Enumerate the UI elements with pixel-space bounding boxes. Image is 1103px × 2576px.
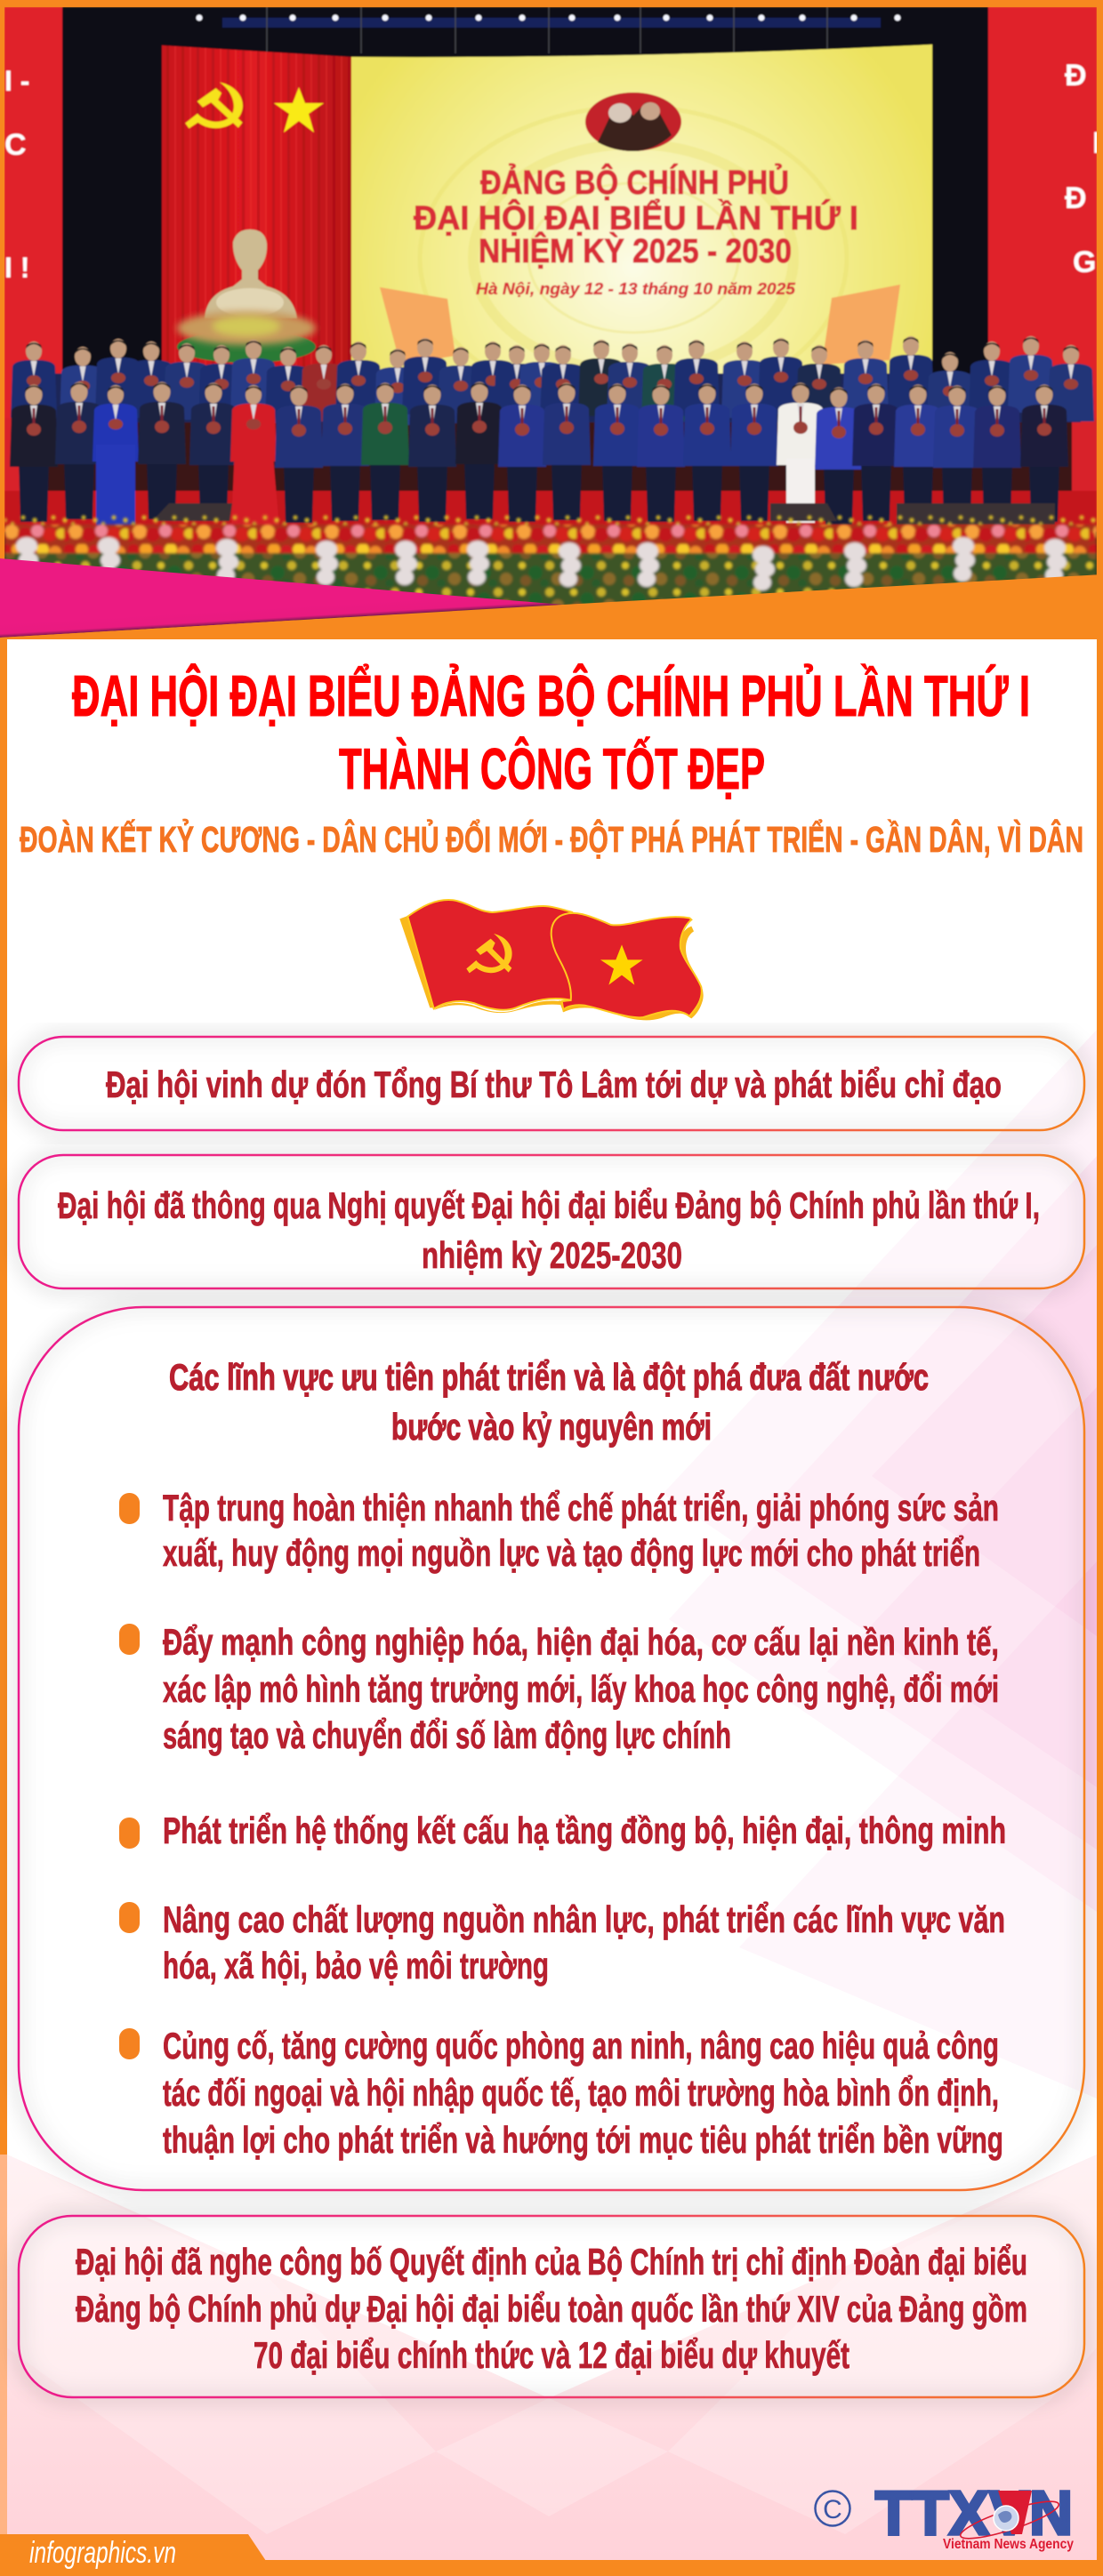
red side panel right: Đ (1065, 59, 1087, 92)
logo: TTXVN with copyright (815, 2478, 1074, 2552)
panel: honoured guest (19, 1037, 1084, 1130)
portrait emblem (585, 92, 681, 151)
footer tab: infographics.vn: infographics.vn (29, 2536, 176, 2570)
footer band (0, 2560, 1103, 2576)
icon: yellow star (274, 87, 324, 132)
screen text: ĐẠI HỘI ĐẠI BIỂU LẦN THỨ I (414, 197, 858, 237)
icon: party flag and national flag (399, 900, 704, 1020)
icon: national star (600, 944, 643, 985)
screen text: Hà Nội, ngày 12 - 13 tháng 10 năm 2025 (476, 280, 796, 298)
icon: copyright: C (823, 2495, 842, 2524)
panel heading (169, 1356, 929, 1448)
panel: priority breakthrough areas (19, 1307, 1084, 2190)
back row of delegates (11, 336, 1094, 429)
red side panel right: G (1073, 245, 1096, 279)
front row of delegates (10, 382, 1068, 529)
icon: copyright (815, 2492, 850, 2525)
riser behind delegates (4, 373, 1097, 532)
delegate in green uniform (361, 382, 409, 520)
main panel background (0, 639, 1097, 2560)
item 4: hóa, xã hội, bảo vệ môi trường (163, 1945, 549, 1986)
panel: delegation announcement (19, 2216, 1084, 2397)
item 2 (119, 1621, 999, 1756)
red side panel right: Đ (1065, 181, 1087, 215)
item 1 (119, 1487, 999, 1574)
item 4 (119, 1898, 1005, 1986)
stage truss and lights (196, 7, 900, 53)
screen text: NHIỆM KỲ 2025 - 2030 (479, 231, 792, 270)
panel: resolution adopted: nhiệm kỳ 2025-2030 (422, 1234, 682, 1276)
pale pink facets on the right (663, 1030, 1097, 2099)
panel: resolution adopted (19, 1155, 1084, 1288)
red side panel left: C (4, 128, 27, 162)
red side panel left: I ! (4, 252, 29, 284)
icon: hammer and sickle (185, 82, 243, 128)
panel heading: bước vào kỷ nguyên mới (391, 1406, 712, 1448)
delegate in white uniform (777, 382, 825, 523)
orange wedge (0, 574, 1103, 645)
LED screen (351, 44, 932, 409)
stage speakers (155, 503, 1055, 525)
Ho Chi Minh bust with flowers (177, 229, 316, 363)
pink lower background (7, 2134, 1097, 2560)
logo wordmark: TTXVN (875, 2478, 1073, 2548)
delegate in red ao dai (230, 385, 279, 529)
title: THÀNH CÔNG TỐT ĐẸP (339, 736, 765, 801)
logo tagline: Vietnam News Agency (943, 2537, 1074, 2552)
screen text: ĐẢNG BỘ CHÍNH PHỦ (480, 162, 789, 202)
red curtain with party emblem (162, 45, 351, 373)
right border (1097, 639, 1103, 2560)
item 5 (119, 2025, 1003, 2161)
red side panel left (4, 7, 64, 419)
logo red V and globe (957, 2491, 1062, 2545)
pink wedge (0, 558, 563, 638)
panel: delegation announcement: 70 đại biểu chính thức và 12 đại biểu dự khuyết (254, 2334, 849, 2376)
red side panel right: I (1092, 126, 1100, 160)
red side panel right (987, 7, 1097, 419)
delegate in blue ao dai (93, 385, 139, 526)
red side panel left: I - (4, 65, 29, 97)
header photo: delegates on stage (4, 7, 1100, 622)
orange banners (380, 287, 455, 365)
flower arrangement (4, 512, 1097, 622)
white orchids (16, 537, 1067, 590)
item 2: sáng tạo và chuyển đổi số làm động lực chính (163, 1714, 731, 1756)
screen text (414, 162, 858, 298)
title (72, 663, 1030, 801)
